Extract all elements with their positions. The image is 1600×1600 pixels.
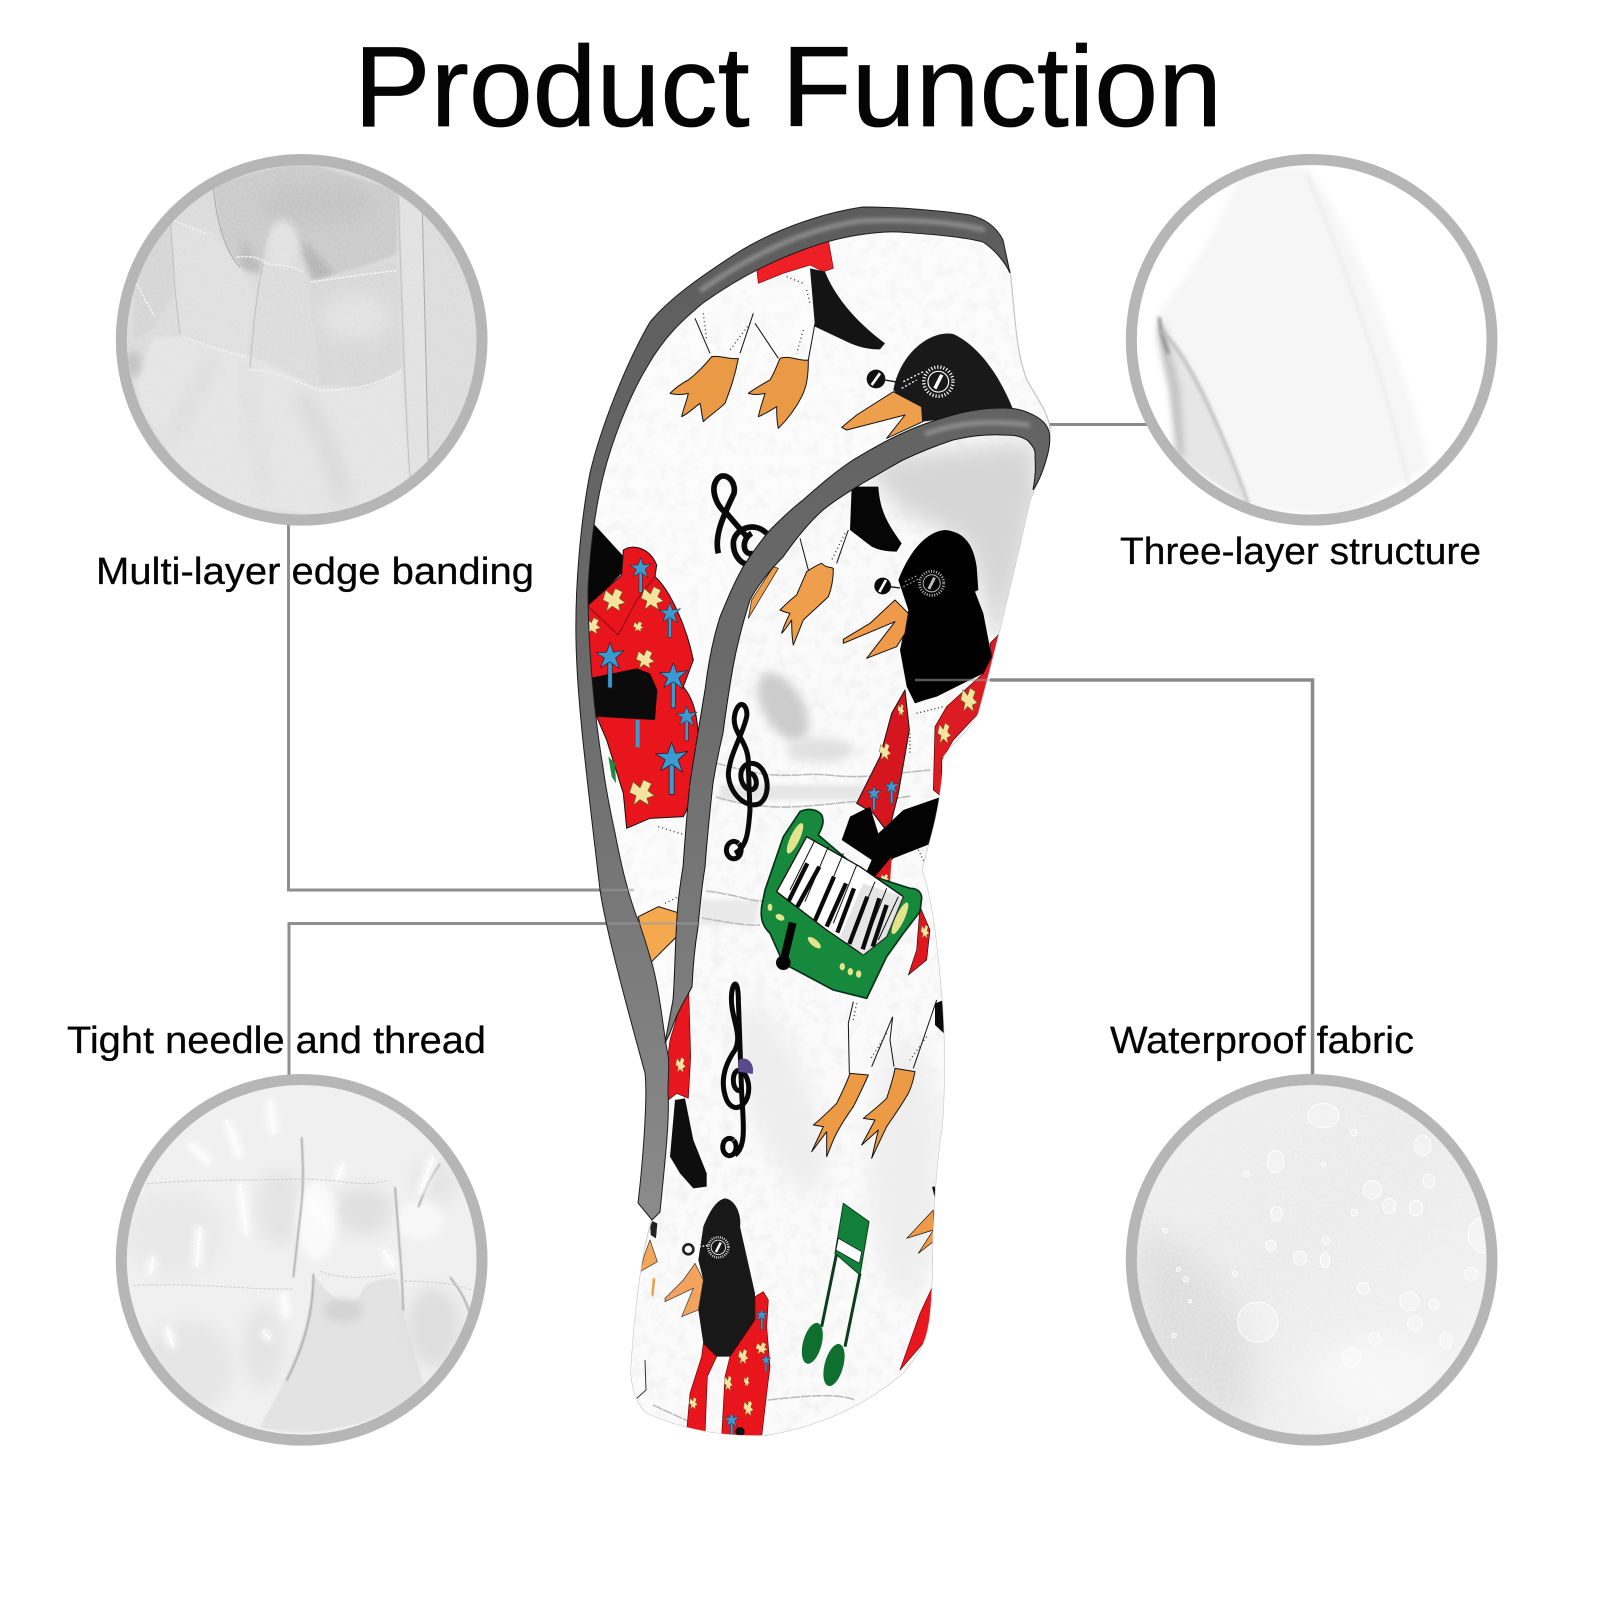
front panel artwork: main penguin with keyboard bbox=[761, 530, 1003, 998]
product: penguin print golf headcover bbox=[560, 190, 1070, 1450]
faint connector overlays on product bbox=[602, 680, 990, 924]
connector: three-layer structure bbox=[1047, 423, 1150, 426]
icon: green music note bbox=[798, 1203, 869, 1388]
front panel artwork: lower clef, feet, note and bottom penguin bbox=[635, 978, 945, 1437]
connector: multi-layer edge banding bbox=[288, 520, 606, 890]
fabric shading bbox=[700, 440, 1040, 1300]
panel: tight needle and thread close-up bbox=[117, 1074, 490, 1447]
back panel artwork: upper penguin bbox=[670, 240, 1013, 564]
band highlights bbox=[700, 220, 1030, 434]
title: Product Function bbox=[354, 24, 1222, 151]
product body bbox=[588, 236, 1049, 1018]
front panel bbox=[620, 400, 1060, 1450]
stitching on front panel bbox=[653, 763, 930, 1422]
label: tight needle and thread: Tight needle and thread bbox=[67, 1020, 486, 1062]
panel: waterproof fabric close-up with water drops bbox=[1127, 1074, 1505, 1447]
panel: three-layer structure close-up bbox=[1127, 154, 1500, 527]
connector: waterproof fabric bbox=[990, 680, 1312, 1080]
treble clef, middle bbox=[726, 704, 767, 859]
label: three-layer structure: Three-layer structure bbox=[1120, 531, 1481, 573]
treble clef, lower bbox=[723, 984, 749, 1156]
product outline edge bbox=[631, 270, 1050, 1435]
label: waterproof fabric: Waterproof fabric bbox=[1110, 1020, 1414, 1062]
icon: green keyboard bbox=[761, 809, 922, 998]
front edge banding bbox=[665, 408, 1050, 1043]
back panel artwork: left penguin in red shirt bbox=[580, 517, 699, 963]
back edge banding bbox=[576, 207, 1010, 1220]
front panel artwork: upper tail and foot bbox=[726, 487, 902, 859]
label: multi-layer edge banding: Multi-layer edge banding bbox=[96, 551, 534, 593]
panel: multi-layer edge banding close-up bbox=[117, 154, 490, 527]
connector: tight needle and thread bbox=[289, 924, 610, 1080]
